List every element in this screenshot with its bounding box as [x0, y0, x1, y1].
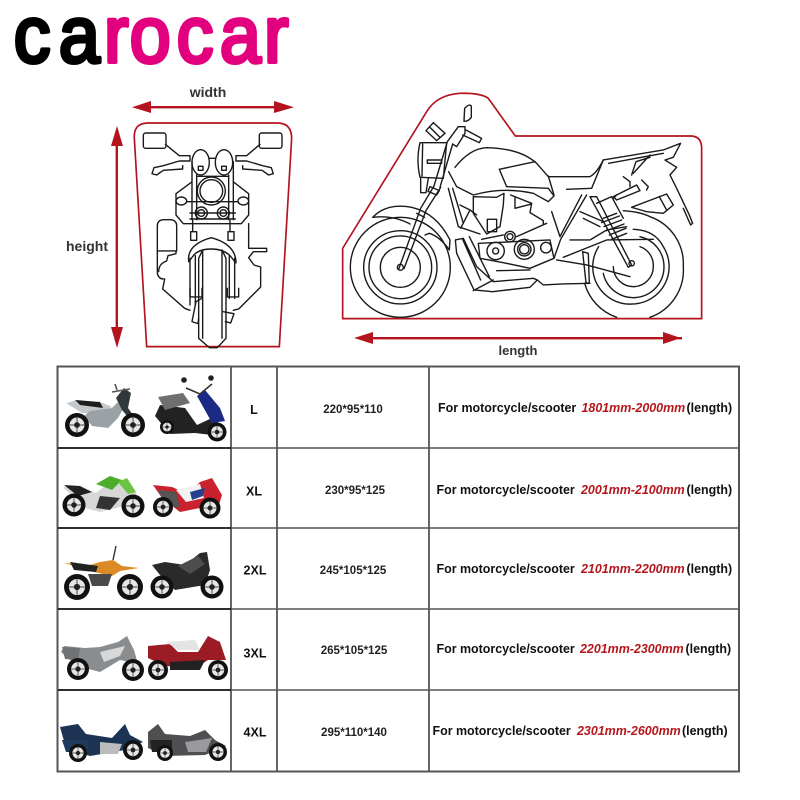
fit text: 2XL: (length): [686, 562, 732, 576]
dimensions: 4XL: 295*110*140: [321, 727, 387, 739]
fit text: L: (length): [686, 401, 732, 415]
fit text: XL: 2001mm-2100mm: [580, 483, 685, 497]
arrow: width: [132, 101, 294, 113]
table: size chart: [58, 366, 739, 772]
row: size L: [65, 375, 732, 442]
arrow: length: [354, 332, 682, 344]
fit text: 4XL: 2301mm-2600mm: [576, 724, 681, 738]
label: width: width: [189, 84, 226, 100]
size: L: L: [250, 403, 258, 417]
dimensions: L: 220*95*110: [323, 404, 383, 416]
fit text: 3XL: For motorcycle/scooter: [436, 642, 575, 656]
fit text: 4XL: (length): [682, 724, 728, 738]
fit text: 4XL: For motorcycle/scooter: [432, 724, 571, 738]
fit text: 2XL: 2101mm-2200mm: [580, 562, 685, 576]
cover outline: side: [343, 93, 702, 319]
row: size 2XL: [64, 546, 732, 600]
thumbnail: cruiser and tourer motorcycles 4XL: [60, 724, 227, 762]
fit text: L: For motorcycle/scooter: [438, 401, 576, 415]
fit text: 3XL: (length): [686, 642, 731, 656]
label: length: length: [498, 343, 538, 358]
label: height: height: [66, 238, 108, 254]
fit text: 3XL: 2201mm-2300mm: [579, 642, 684, 656]
fit text: L: 1801mm-2000mm: [582, 401, 685, 415]
table grid: [58, 366, 739, 772]
size: 4XL: 4XL: [244, 726, 267, 740]
thumbnail: motorcycle and scooter L: [65, 375, 226, 442]
diagram: front view motorcycle under cover: [134, 123, 292, 348]
cover outline: front: [134, 123, 292, 347]
row: size XL: [62, 476, 732, 518]
size: 3XL: 3XL: [244, 646, 267, 660]
size: XL: XL: [246, 484, 262, 498]
dimensions: XL: 230*95*125: [325, 485, 386, 497]
size: 2XL: 2XL: [244, 564, 267, 578]
motorcycle line art: front: [143, 133, 282, 348]
arrow: height: [111, 126, 123, 348]
motorcycle line art: side: [350, 105, 693, 317]
dimensions: 3XL: 265*105*125: [321, 645, 388, 657]
diagram: side view motorcycle under cover: [343, 93, 702, 319]
row: size 3XL: [61, 636, 731, 681]
thumbnail: dirt and naked motorcycles 2XL: [64, 546, 224, 600]
thumbnail: sport motorcycles XL: [62, 476, 222, 518]
dimensions: 2XL: 245*105*125: [320, 565, 387, 577]
row: size 4XL: [60, 724, 728, 762]
fit text: 2XL: For motorcycle/scooter: [436, 562, 575, 576]
thumbnail: touring motorcycles 3XL: [61, 636, 228, 681]
fit text: XL: For motorcycle/scooter: [436, 483, 575, 497]
fit text: XL: (length): [686, 483, 732, 497]
